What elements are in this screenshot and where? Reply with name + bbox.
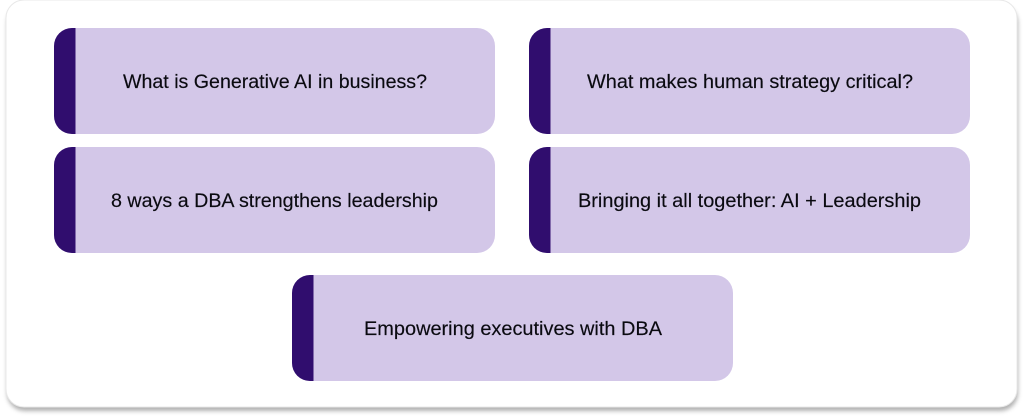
card: Empowering executives with DBA	[292, 275, 733, 381]
card: What makes human strategy critical?	[529, 28, 970, 134]
card: Empowering executives with DBA: Empowering executives with DBA	[364, 318, 662, 340]
card: 8 ways a DBA strengthens leadership: 8 ways a DBA strengthens leadership	[111, 190, 438, 212]
card: Bringing it all together: AI + Leadership	[529, 147, 970, 253]
card: Bringing it all together: AI + Leadership: Bringing it all together: AI + Leadership	[578, 190, 921, 212]
card: What is Generative AI in business?	[54, 28, 495, 134]
card: 8 ways a DBA strengthens leadership	[54, 147, 495, 253]
card: What makes human strategy critical?: What makes human strategy critical?	[587, 71, 913, 93]
card: What is Generative AI in business?: What is Generative AI in business?	[123, 71, 427, 93]
